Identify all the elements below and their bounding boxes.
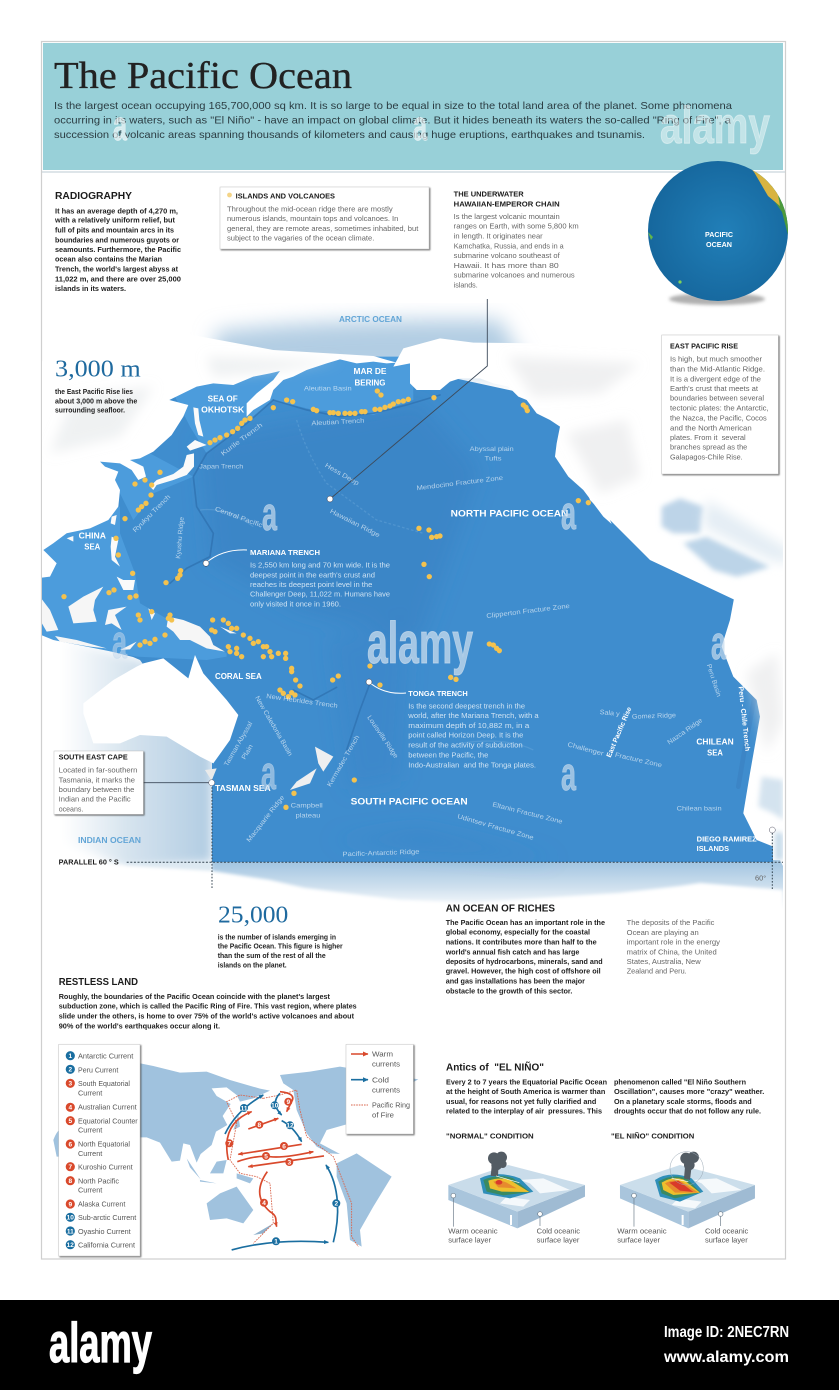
watermarks: a	[261, 746, 276, 799]
panel: an ocean of riches: The Pacific Ocean has an important role in the	[446, 918, 605, 927]
intro text: occurring in its waters, such as "El Niño" - have an impact on global climate. But it hides beneath its waters the so-called "Ring of Fire", a	[54, 116, 731, 126]
callout: Tonga Trench: point called Horizon Deep. It is the	[408, 731, 523, 740]
sea floor feature labels: Kermadec Trench	[326, 734, 361, 788]
ocean names: SOUTH PACIFIC OCEAN	[351, 797, 468, 807]
atlantic off patagonia	[758, 777, 783, 820]
panel: radiography: boundaries and numerous guyots or	[55, 235, 179, 244]
el nino slab	[620, 1152, 755, 1228]
panel: restless land: RESTLESS LAND	[59, 977, 138, 988]
ocean names: NORTH PACIFIC OCEAN	[451, 509, 569, 519]
sea floor feature labels	[132, 386, 750, 858]
panel: El Nino text: droughts occur that do not follow any rule.	[614, 1107, 761, 1116]
legend: currents list: Australian Current	[78, 1104, 137, 1111]
legend: currents list: 7	[68, 1164, 72, 1171]
page frame	[42, 42, 786, 1259]
panel: underwater Hawaiian-Emperor chain: ranges on Earth, with some 5,800 km	[454, 222, 579, 231]
current number badges: 11	[241, 1105, 248, 1112]
legend: current types: currents	[372, 1062, 401, 1069]
normal labels	[448, 1228, 581, 1245]
intro text	[54, 101, 732, 141]
legend: currents list: North Equatorial	[78, 1142, 130, 1149]
panel: an ocean of riches: gravel. However, the high cost of offshore oil	[446, 967, 601, 976]
sea floor feature labels: Mendocino Fracture Zone	[416, 475, 504, 492]
stat: 3,000 m	[55, 357, 141, 415]
sea floor feature labels: Aleutian Basin	[304, 386, 352, 393]
panel: El Nino text: On a planetary scale storms, floods and	[614, 1097, 752, 1106]
land: Australia	[83, 655, 238, 763]
southern ocean fade	[212, 860, 783, 903]
panel: east pacific rise: boundaries between several	[670, 394, 764, 403]
legend: currents list: 8	[68, 1178, 72, 1185]
legend: currents list: 1	[68, 1053, 72, 1060]
parallel 60 S dotted boundary	[59, 784, 783, 889]
panel: an ocean of riches: obstacle to the growth of this sector.	[446, 986, 572, 995]
sea names: OKHOTSK	[201, 406, 244, 415]
el nino labels: surface layer	[617, 1238, 661, 1245]
callout: south east cape: Indian and the Pacific	[59, 795, 131, 804]
sea names: MAR DE	[354, 367, 387, 376]
sea floor feature labels: Sala y	[599, 709, 621, 718]
legend: current types: Warm	[372, 1052, 393, 1059]
image id: Image ID: 2NEC7RN	[664, 1324, 789, 1341]
panel: underwater Hawaiian-Emperor chain: submarine volcano southeast of	[454, 251, 561, 260]
callout: south east cape	[54, 751, 215, 814]
sea floor feature labels: Challenger	[567, 741, 605, 758]
legend: currents list: Kuroshio Current	[78, 1165, 133, 1172]
panel: an ocean of riches: global economy, especially for the coastal	[446, 928, 590, 937]
sea floor feature labels: plateau	[296, 812, 321, 819]
panel: islands and volcanoes: subject to the vagaries of the ocean climate.	[227, 234, 374, 243]
panel: east pacific rise: than the Mid-Atlantic Ridge.	[670, 364, 765, 373]
legend: currents list: 4	[68, 1105, 72, 1112]
panel: underwater Hawaiian-Emperor chain: HAWAIIAN-EMPEROR CHAIN	[454, 199, 560, 208]
panel: east pacific rise	[662, 335, 778, 474]
stat: 3,000 m: about 3,000 m above the	[55, 396, 137, 405]
legend: currents list: California Current	[78, 1242, 135, 1249]
panel: east pacific rise: Earth's crust that meets at	[670, 384, 758, 393]
legend: currents list: 2	[68, 1067, 72, 1074]
callout: Mariana Trench	[203, 548, 390, 609]
sea names: ISLANDS	[697, 844, 729, 853]
panel: radiography: Trench, the world's largest abyss at	[55, 265, 179, 274]
panel: underwater Hawaiian-Emperor chain: islands.	[454, 280, 478, 289]
panel: El Nino text: Every 2 to 7 years the Equatorial Pacific Ocean	[446, 1077, 607, 1086]
icon: volcano dot	[227, 193, 232, 197]
mini map land	[53, 1063, 418, 1247]
indian ocean fade	[75, 647, 212, 866]
legend: current types: Pacific Ring	[372, 1103, 410, 1110]
sea floor feature labels: Hawaiian Ridge	[329, 508, 381, 539]
intro text: succession of volcanic areas spanning thousands of kilometers and causing huge eruptions, earthquakes and tsunamis.	[54, 130, 645, 141]
sea floor feature labels: Peru Basin	[705, 663, 722, 698]
current number badges: 2	[334, 1201, 338, 1208]
callout: Mariana Trench: deepest point in the earth's crust and	[250, 570, 375, 579]
panel: restless land: subduction zone, which is called the Pacific Ring of Fire. This vast region, where plates	[59, 1002, 357, 1011]
current number badges: 4	[262, 1200, 266, 1207]
legend: currents list: Oyashio Current	[78, 1229, 131, 1236]
legend: currents list: 3	[68, 1081, 72, 1088]
current number badges: 5	[264, 1153, 268, 1160]
current number badges: 1	[274, 1239, 278, 1246]
panel: El Nino text: related to the interplay of air pressures. This	[446, 1107, 602, 1116]
sea floor feature labels: Japan Trench	[199, 463, 244, 470]
panel: El Nino text: Antics of "EL NIÑO"	[446, 1061, 544, 1074]
sea names: SEA	[84, 543, 101, 552]
arctic ocean fade	[215, 320, 530, 375]
sea names: SEA OF	[208, 395, 238, 404]
watermarks: a	[413, 102, 427, 149]
legend: current types	[346, 1044, 413, 1134]
panel: east pacific rise: and the North American	[670, 423, 752, 432]
panel: restless land: slide under the others, is home to over 75% of the world's active volcanoes and about	[59, 1012, 355, 1021]
current number badges	[225, 1098, 340, 1246]
callout: south east cape: oceans.	[59, 805, 83, 814]
panel: radiography: RADIOGRAPHY	[55, 191, 132, 202]
trenches	[170, 395, 754, 787]
panel: an ocean of riches: deposits of hydrocarbons, minerals, sand and	[446, 957, 603, 966]
panel: underwater Hawaiian-Emperor chain: Hawaii. It has more than 80	[454, 261, 559, 270]
panel: El Nino text: at the height of South America is warmer than	[446, 1087, 606, 1096]
diego ramirez marker	[756, 827, 775, 839]
panel: islands and volcanoes: numerous islands, mountain tops and volcanoes. In	[227, 214, 398, 223]
legend: currents list: Current	[78, 1188, 102, 1195]
callout: Tonga Trench: world, after the Mariana Trench, with a	[407, 711, 539, 720]
sea floor feature labels: Kurile Trench	[220, 422, 264, 458]
sea floor feature labels: Fracture Zone	[614, 752, 663, 769]
panel: underwater Hawaiian-Emperor chain	[454, 190, 579, 289]
site url: www.alamy.com	[663, 1349, 789, 1366]
sea floor feature labels: Kyushu Ridge	[175, 516, 186, 559]
arctic ocean label: ARCTIC OCEAN	[339, 315, 402, 324]
title: The Pacific Ocean	[54, 55, 352, 97]
panel: east pacific rise: branches spread as the	[670, 443, 747, 452]
panel: islands and volcanoes: general, they are remote areas, sometimes inhabited, but	[227, 224, 418, 233]
el nino labels: Warm oceanic	[617, 1228, 667, 1235]
ring of fire	[227, 1090, 358, 1247]
sea floor feature labels: Clipperton Fracture Zone	[486, 603, 571, 620]
panel: underwater Hawaiian-Emperor chain: submarine volcanoes and numerous	[454, 271, 575, 280]
stat: 25,000: the Pacific Ocean. This figure is higher	[218, 942, 343, 951]
shallow shelves	[37, 357, 413, 660]
stat: 25,000: than the sum of the rest of all the	[218, 951, 326, 960]
land: Tasmania	[205, 768, 217, 781]
callout: south east cape: boundary between the	[59, 785, 134, 794]
callout: Mariana Trench: only visited it once in 1960.	[250, 600, 341, 609]
ocean names	[351, 509, 569, 807]
stat: 25,000	[218, 903, 343, 969]
side note: The deposits of the Pacific	[627, 918, 715, 927]
legend: currents list: South Equatorial	[78, 1081, 130, 1088]
callout: Tonga Trench: result of the activity of subduction	[408, 741, 523, 750]
current number badges: 3	[287, 1159, 291, 1166]
globe: OCEAN	[706, 240, 732, 249]
diagram: normal condition	[446, 1132, 585, 1245]
side note: important role in the energy	[627, 938, 720, 947]
sea names: BERING	[354, 378, 386, 388]
stat: 25,000: is the number of islands emerging in	[218, 932, 336, 941]
panel: radiography: full of pits and mountain arcs in its	[55, 226, 174, 235]
bottom credit bar	[0, 1300, 839, 1390]
header panel	[42, 43, 785, 172]
legend: current types: currents	[372, 1087, 401, 1094]
land: North and South America	[393, 333, 790, 867]
sea floor feature labels: Macquarie Ridge	[246, 794, 286, 844]
legend: currents list: Antarctic Current	[78, 1053, 133, 1060]
callout: Tonga Trench: Is the second deepest trench in the	[408, 702, 525, 711]
pacific ocean body	[110, 379, 773, 862]
panel: El Nino text: Oscillation", causes more "crazy" weather.	[614, 1087, 764, 1096]
callout: south east cape: Tasmania, it marks the	[59, 775, 135, 784]
legend: currents list: Current	[78, 1128, 102, 1135]
watermarks: alamy	[367, 611, 473, 676]
deeper water tones	[488, 864, 516, 865]
normal labels: surface layer	[448, 1238, 492, 1245]
60 degree label: 60°	[755, 874, 766, 883]
el nino labels: surface layer	[705, 1238, 748, 1245]
current number badges: 10	[271, 1103, 279, 1110]
cold currents	[225, 1093, 338, 1250]
watermarks: alamy	[660, 97, 770, 155]
panel: east pacific rise: plates. From it several	[670, 433, 746, 442]
current number badges: 12	[286, 1123, 294, 1130]
panel: restless land: 90% of the world's earthquakes occur along it.	[59, 1021, 220, 1030]
panel: radiography: islands in its waters.	[55, 284, 126, 293]
panel: underwater Hawaiian-Emperor chain: Kamchatka, Russia, and ends in a	[454, 241, 565, 250]
callout: Tonga Trench: maximum depth of 10,882 m, in a	[408, 721, 529, 730]
watermarks	[112, 97, 770, 800]
legend: currents list: North Pacific	[78, 1178, 120, 1185]
gulf of mexico and caribbean	[662, 498, 790, 577]
callout: Mariana Trench: Challenger Deep, 11,022 m. Humans have	[250, 590, 390, 599]
sea floor feature labels: Hess Deep	[324, 462, 360, 487]
panel: El Nino text: phenomenon called "El Niño Southern	[614, 1077, 746, 1086]
side note	[627, 918, 720, 976]
callout: Mariana Trench: Is 2,550 km long and 70 km wide. It is the	[250, 560, 390, 569]
panel: restless land	[59, 977, 357, 1030]
panel: an ocean of riches: AN OCEAN OF RICHES	[446, 904, 555, 915]
callout: Tonga Trench: Indo-Australian and the Tonga plates.	[408, 760, 536, 769]
panel: radiography: 11,022 m, and there are over 25,000	[55, 274, 181, 283]
panel: radiography	[54, 191, 181, 293]
panel: east pacific rise: the Nazca, the Pacific, Cocos	[670, 413, 767, 422]
el nino labels	[617, 1228, 749, 1245]
sea floor feature labels: Campbell	[291, 802, 323, 809]
panel: underwater Hawaiian-Emperor chain: in length. It originates near	[454, 231, 543, 240]
legend: current types: Cold	[372, 1077, 389, 1084]
land: Asia	[37, 333, 397, 578]
side note: States, Australia, New	[627, 957, 701, 966]
indian ocean label: INDIAN OCEAN	[78, 836, 141, 845]
globe	[648, 161, 788, 307]
panel: east pacific rise: Galapagos-Chile Rise.	[670, 452, 743, 461]
callout: Tonga Trench	[366, 679, 539, 769]
sea floor feature labels: Nazca Ridge	[666, 717, 704, 746]
callout: south east cape: Located in far-southern	[59, 765, 137, 774]
legend: currents list: Sub-arctic Current	[78, 1215, 136, 1222]
sea floor feature labels: Tasman Abyssal	[223, 720, 255, 768]
land: Japan and Asian islands	[67, 407, 207, 590]
stat: 25,000: 25,000	[218, 903, 288, 929]
sea floor feature labels: Plain	[241, 743, 255, 761]
globe: PACIFIC	[705, 230, 733, 239]
leader pins	[451, 1193, 542, 1227]
legend: currents list: Peru Current	[78, 1068, 118, 1075]
sea names: SEA	[707, 748, 723, 757]
legend: currents list	[59, 1044, 140, 1256]
current number badges: 6	[282, 1143, 286, 1150]
land: New Guinea	[167, 617, 225, 652]
chart: currents mini map	[53, 1063, 418, 1250]
panel: an ocean of riches: nations. It contributes more than half to the	[446, 938, 597, 947]
parallel label: PARALLEL 60 ° S	[59, 858, 119, 866]
stat: 3,000 m: 3,000 m	[55, 357, 141, 383]
side note: matrix of China, the United	[627, 947, 717, 956]
sea floor feature labels: Eltanin Fracture Zone	[492, 801, 564, 826]
callout: Mariana Trench: reaches its deepest point level in the	[250, 580, 372, 589]
legend: currents list: Alaska Current	[78, 1202, 125, 1209]
panel: islands and volcanoes: ISLANDS AND VOLCANOES	[236, 192, 335, 201]
sea floor feature labels: New Caledonia Basin	[253, 695, 294, 758]
panel: islands and volcanoes	[220, 187, 429, 249]
legend: currents list: 9	[68, 1201, 72, 1208]
panel: east pacific rise: It is a divergent edge of the	[670, 374, 761, 383]
panel: radiography: with a relatively uniform relief, but	[54, 216, 176, 225]
sea names	[79, 367, 757, 853]
leader line: Hawaiian-Emperor chain	[327, 299, 487, 502]
normal labels: Warm oceanic	[448, 1228, 498, 1235]
stat: 3,000 m: the East Pacific Rise lies	[55, 387, 133, 396]
antarctica	[116, 864, 783, 906]
current number badges: 9	[286, 1099, 290, 1106]
panel: east pacific rise: EAST PACIFIC RISE	[670, 342, 738, 351]
leader pins	[632, 1193, 723, 1227]
panel: underwater Hawaiian-Emperor chain: THE UNDERWATER	[454, 190, 525, 199]
panel: radiography: ocean also contains the Marian	[55, 255, 162, 264]
legend: currents list: Current	[78, 1090, 102, 1097]
panel: radiography: seamounts. Furthermore, the Pacific	[55, 245, 181, 254]
panel: an ocean of riches: and gas installations has been the major	[446, 976, 585, 985]
sea floor feature labels: New Hebrides Trench	[266, 693, 338, 710]
sea names: DIEGO RAMIREZ	[697, 835, 757, 844]
legend: currents list: 12	[67, 1242, 74, 1249]
normal labels: surface layer	[537, 1238, 580, 1245]
volcano dots	[61, 388, 591, 810]
panel: east pacific rise: tectonic plates: the Antarctic,	[670, 404, 769, 413]
panel: islands and volcanoes: Throughout the mid-ocean ridge there are mostly	[227, 204, 393, 213]
main map	[37, 315, 790, 925]
sea names: CHILEAN	[696, 737, 734, 746]
legend: currents list: 11	[67, 1228, 74, 1235]
legend: currents list: 6	[68, 1141, 72, 1148]
panel: an ocean of riches	[445, 904, 720, 995]
panel: east pacific rise: Is high, but much smoother	[670, 355, 763, 364]
normal labels: Cold oceanic	[537, 1228, 581, 1235]
el nino labels: Cold oceanic	[705, 1228, 749, 1235]
watermarks: a	[561, 747, 576, 800]
sea names: CHINA	[79, 531, 106, 540]
stat: 3,000 m: surrounding seafloor.	[55, 406, 125, 415]
map labels	[78, 315, 757, 858]
warm currents	[227, 1092, 324, 1227]
watermarks: a	[262, 487, 277, 540]
diagram: el nino condition	[611, 1132, 755, 1245]
callout: Tonga Trench: TONGA TRENCH	[408, 689, 468, 698]
sea floor feature labels: Chilean basin	[677, 806, 722, 813]
panel: El Nino text	[446, 1061, 764, 1116]
current number badges: 8	[257, 1122, 261, 1129]
diagram: el nino condition: "EL NIÑO" CONDITION	[611, 1132, 694, 1141]
ridges	[200, 420, 533, 750]
panel: an ocean of riches: world's annual fish catch and has large	[445, 947, 579, 956]
current number badges: 7	[227, 1141, 231, 1148]
panel: El Nino text: usual, for reasons not yet fully clarified and	[446, 1097, 597, 1106]
legend: currents list: 5	[68, 1118, 72, 1125]
sea names: CORAL SEA	[215, 672, 262, 681]
sea floor feature labels: Central Pacific	[214, 506, 264, 530]
watermarks: a	[711, 616, 726, 669]
land: New Zealand	[315, 747, 333, 772]
normal slab	[448, 1152, 585, 1228]
watermarks: a	[112, 615, 127, 668]
stat: 25,000: islands on the planet.	[218, 960, 287, 969]
legend: currents list: Current	[78, 1151, 102, 1158]
panel: radiography: It has an average depth of 4,270 m,	[55, 206, 178, 215]
sea floor feature labels: Gomez Ridge	[632, 712, 676, 721]
callout: Tonga Trench: between the Pacific, the	[408, 751, 488, 760]
side note: Ocean are playing an	[627, 928, 699, 937]
legend: currents list: Equatorial Counter	[78, 1118, 138, 1125]
alamy logo: alamy	[49, 1311, 152, 1374]
panel: underwater Hawaiian-Emperor chain: Is the largest volcanic mountain	[454, 212, 560, 221]
callout: south east cape: SOUTH EAST CAPE	[59, 752, 128, 761]
panel: restless land: Roughly, the boundaries of the Pacific Ocean coincide with the planet's largest	[59, 992, 331, 1001]
sea floor feature labels: Udintsev Fracture Zone	[456, 813, 535, 842]
side note: Zealand and Peru.	[627, 967, 687, 976]
legend: current types: of Fire	[372, 1112, 394, 1119]
sea floor feature labels: Tufts	[484, 456, 502, 463]
sea floor feature labels: Aleutian Trench	[311, 418, 365, 427]
sea floor feature labels: Pacific-Antarctic Ridge	[342, 849, 420, 858]
intro text: Is the largest ocean occupying 165,700,000 sq km. It is so large to be equal in size to the total land area of the planet. Some phenomena	[54, 101, 732, 112]
sea floor feature labels: East Pacific Rise	[606, 706, 633, 759]
sea floor feature labels: Ryukyu Trench	[132, 494, 172, 534]
sea floor feature labels: Louisville Ridge	[365, 714, 399, 760]
land relief shading	[507, 357, 783, 753]
legend: currents list: 10	[67, 1215, 74, 1222]
sea names: TASMAN SEA	[215, 784, 271, 793]
sea floor feature labels: Peru - Chile Trench	[737, 686, 750, 752]
diagram: normal condition: "NORMAL" CONDITION	[446, 1132, 534, 1141]
watermarks: a	[561, 486, 576, 539]
callout: Mariana Trench: MARIANA TRENCH	[250, 548, 320, 557]
watermarks: a	[113, 102, 127, 149]
sea floor feature labels: Abyssal plain	[470, 446, 514, 453]
